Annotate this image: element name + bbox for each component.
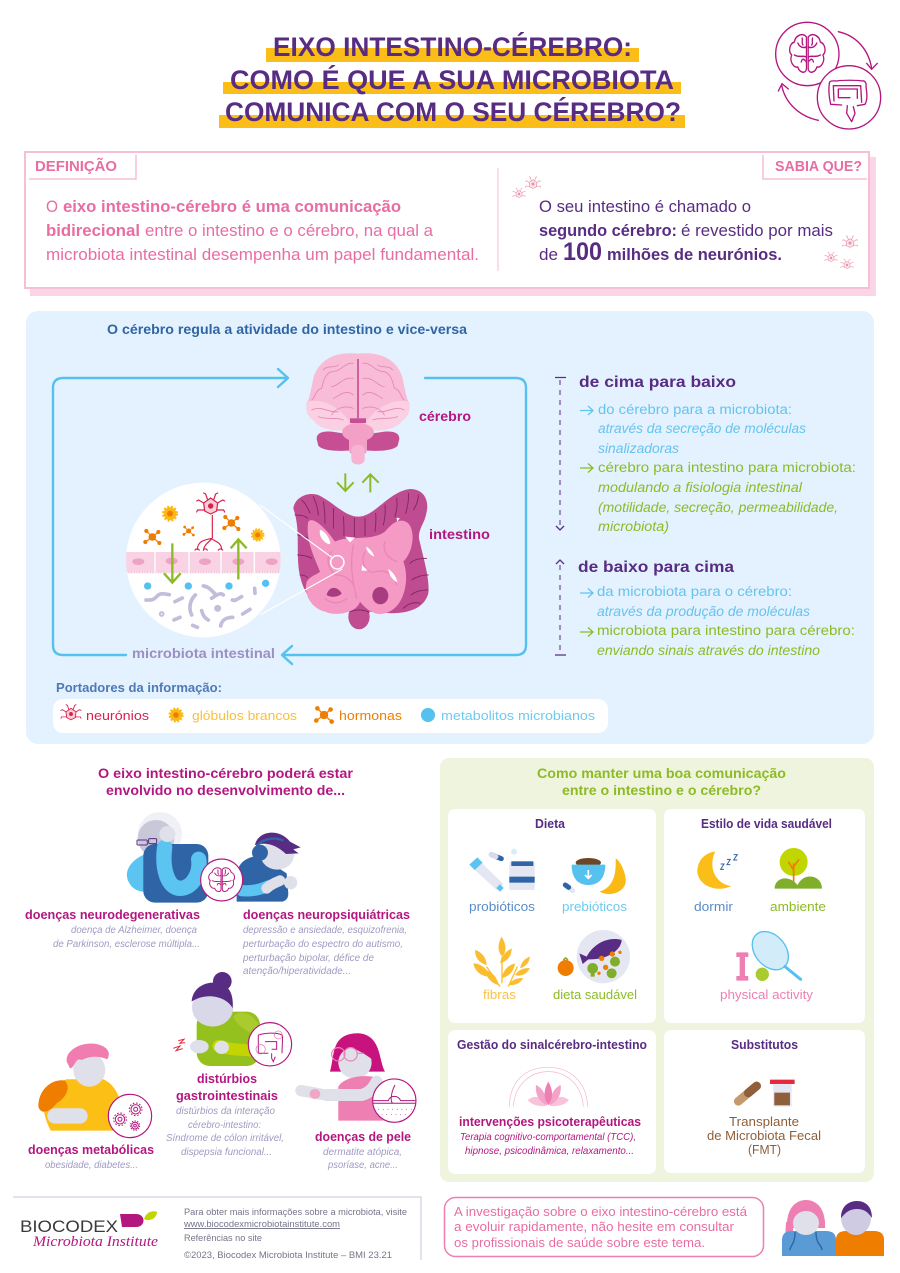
text: neuropsychiatric diseases: depressão e ansiedade, esquizofrenia, [243,924,407,936]
label: healthy diet: dieta saudável [553,987,637,1002]
panel heading: O cérebro regula a atividade do intestino e vice-versa [107,322,468,337]
label: environment: ambiente [770,899,826,914]
text: neuropsychiatric diseases: doenças neuropsiquiátricas [243,907,410,922]
footer: information text: Para obter mais informações sobre a microbiota, visite [184,1207,407,1218]
panel heading [537,766,786,798]
legend: metabolitos microbianos [441,708,596,723]
label: physical activity: physical activity [720,987,814,1002]
footer: information text [183,1207,407,1261]
text: metabolic diseases [28,1142,154,1171]
top-down pathway: modulando a fisiologia intestinal [598,480,803,495]
text: psychotherapeutic interventions: intervenções psicoterapêuticas [459,1114,641,1129]
label: probiotics: probióticos [469,899,536,914]
heading: diseases: O eixo intestino-cérebro poderá estar [98,766,354,781]
text: FMT: de Microbiota Fecal [707,1128,821,1143]
text: GI disorders: distúrbios da interação [176,1105,275,1117]
icon: small neurons [513,177,858,269]
text: neuropsychiatric diseases: perturbação do espectro do autismo, [242,938,403,950]
top-down pathway: de cima para baixo [579,374,736,391]
top-down pathway: cérebro para intestino para microbiota: [598,460,856,475]
text: FMT [707,1114,821,1157]
top-down pathway: sinalizadoras [598,441,679,456]
text: skin diseases [315,1129,411,1171]
icon: brain badge [201,859,243,901]
panel heading: Como manter uma boa comunicação [537,766,786,781]
icon: brain and gut cycle [776,22,881,129]
bottom-up pathway: da microbiota para o cérebro: [597,584,792,599]
bottom-up pathway [555,559,855,658]
text: metabolic diseases: obesidade, diabetes... [45,1159,138,1171]
label: cérebro: cérebro [419,409,471,424]
text: metabolic diseases: doenças metabólicas [28,1142,154,1157]
footer: logo: BIOCODEX [20,1217,118,1236]
figure: woman with skin disease [301,1033,416,1122]
legend [53,699,608,733]
text: skin diseases: dermatite atópica, [323,1146,402,1158]
panel: definition and did-you-know: DEFINIÇÃO [35,157,117,175]
text: GI disorders: dispepsia funcional... [181,1146,272,1158]
footer: information text: www.biocodexmicrobiotainstitute.com [183,1219,340,1230]
figure: health professionals [782,1200,884,1256]
text: FMT: (FMT) [748,1142,781,1157]
text: GI disorders: gastrointestinais [176,1088,278,1103]
legend: hormonas [339,708,403,723]
text: FMT: Transplante [729,1114,799,1129]
panel: definition and did-you-know [25,152,876,296]
card: diet [448,809,656,1023]
top-down pathway [555,374,856,534]
card: gut-brain signal management: Gestão do sinalcérebro-intestino [457,1038,647,1052]
bottom-up pathway: enviando sinais através do intestino [597,643,821,658]
text: neurodegenerative diseases: doenças neurodegenerativas [25,907,200,922]
label: microbiota intestinal: microbiota intestinal [132,645,275,661]
text: GI disorders: distúrbios [197,1071,257,1086]
definition text: entre o intestino e o cérebro, na qual a [145,222,434,240]
callout: os profissionais de saúde sobre este tema. [454,1236,705,1250]
loop arrows [53,369,526,664]
definition text: bidirecional [46,222,140,240]
icon: capsule and container [738,1080,795,1107]
callout: A investigação sobre o eixo intestino-cérebro está [454,1205,747,1219]
did-you-know text: 100 [563,238,602,266]
legend: glóbulos brancos [192,708,298,723]
definition text: O [46,198,58,216]
definition text: microbiota intestinal desempenha um papel fundamental. [46,246,479,264]
did-you-know text: segundo cérebro: [539,222,677,240]
footer: logo [13,1197,421,1260]
panel: gut-brain axis [26,311,874,744]
definition text [46,198,479,264]
text: GI disorders: cérebro-intestino: [188,1119,261,1131]
figure: woman with GI pain [173,972,292,1066]
text: skin diseases: psoríase, acne... [327,1159,398,1171]
heading: diseases: envolvido no desenvolvimento de... [106,783,345,798]
callout: a evoluir rapidamente, não hesite em consultar [454,1220,734,1234]
footer: information text: ©2023, Biocodex Microbiota Institute – BMI 23.21 [184,1250,392,1261]
card: healthy lifestyle [664,809,865,1023]
label: sleep: dormir [694,899,734,914]
heading: diseases [98,766,354,798]
panel: how to maintain communication [440,758,874,1182]
did-you-know text: milhões de neurónios. [607,246,782,264]
text: psychotherapeutic interventions: Terapia cognitivo-comportamental (TCC), [460,1132,636,1143]
icon: probiotics [469,849,535,892]
text: GI disorders [166,1071,284,1158]
text: neurodegenerative diseases: doença de Alzheimer, doença [71,924,197,936]
bottom-up pathway: de baixo para cima [578,559,734,576]
icon: healthy diet [558,930,630,983]
icon: fibres [473,937,530,987]
card: healthy lifestyle: Estilo de vida saudável [701,817,832,831]
panel: definition and did-you-know: SABIA QUE? [775,159,862,175]
text: neuropsychiatric diseases: perturbação bipolar, défice de [242,952,374,964]
label: prebiotics: prebióticos [562,899,628,914]
figure: man with metabolic disease [38,1044,152,1138]
legend heading: Portadores da informação: [56,680,222,695]
text: neuropsychiatric diseases [242,907,410,977]
arrows between brain and gut [337,473,379,492]
icon: environment [775,848,822,889]
footer: information text: Referências no site [184,1233,262,1244]
card: substitutes [664,1030,865,1173]
top-down pathway: microbiota) [598,519,669,534]
footer: logo: Microbiota Institute [32,1234,158,1250]
card: gut-brain signal management [448,1030,656,1174]
did-you-know text: de [539,246,558,264]
text: GI disorders: Síndrome de cólon irritável, [166,1132,284,1144]
figure: teenager with headphones [237,833,301,902]
card: diet: Dieta [535,817,566,831]
intestine illustration [260,489,429,629]
icon: moon [697,851,737,889]
top-down pathway: do cérebro para a microbiota: [598,402,792,417]
definition text: eixo intestino-cérebro é uma comunicação [63,198,401,216]
panel heading: entre o intestino e o cérebro? [562,783,761,798]
brain illustration [306,353,410,464]
title: EIXO INTESTINO-CÉREBRO: [273,31,632,62]
icon: prebiotics [565,858,626,894]
text: psychotherapeutic interventions: hipnose, psicodinâmica, relaxamento... [465,1146,634,1157]
top-down pathway: através da secreção de moléculas [598,421,806,436]
callout [444,1198,764,1256]
label: intestino: intestino [429,527,490,542]
icon: lotus [509,1067,588,1107]
text: neuropsychiatric diseases: atenção/hiperatividade... [243,965,351,977]
icon: physical activity [736,924,801,981]
did-you-know text: é revestido por mais [681,222,833,240]
figure: elderly woman [127,812,208,903]
did-you-know text [539,198,833,266]
label: fibres: fibras [483,987,517,1002]
did-you-know text: O seu intestino é chamado o [539,198,751,216]
card: substitutes: Substitutos [731,1038,798,1052]
title [219,31,685,128]
top-down pathway: (motilidade, secreção, permeabilidade, [598,500,838,515]
text: psychotherapeutic interventions [459,1114,641,1157]
title: COMO É QUE A SUA MICROBIOTA [230,64,674,95]
text: neurodegenerative diseases [25,907,200,950]
text: skin diseases: doenças de pele [315,1129,411,1144]
text: neurodegenerative diseases: de Parkinson, esclerose múltipla... [53,938,200,950]
legend: neurónios [86,708,150,723]
bottom-up pathway: através da produção de moléculas [597,604,810,619]
microscope view [126,483,283,637]
bottom-up pathway: microbiota para intestino para cérebro: [597,623,855,638]
title: COMUNICA COM O SEU CÉREBRO? [225,96,681,127]
